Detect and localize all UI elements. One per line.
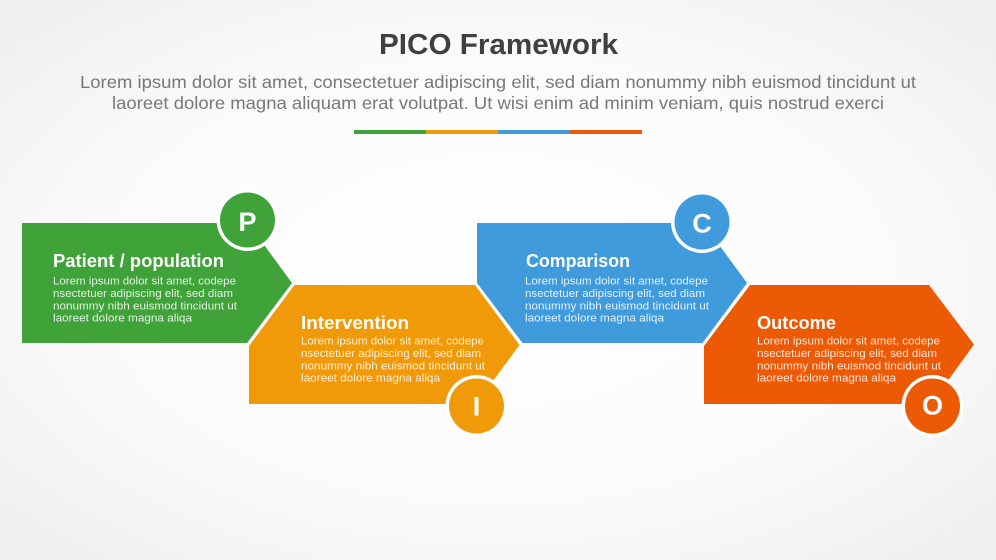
heading: patient / population: Patient / population: [53, 251, 224, 271]
badge: P: [216, 189, 278, 251]
body text: comparison: laoreet dolore magna aliqa: [525, 313, 665, 325]
body text: outcome: laoreet dolore magna aliqa: [757, 373, 897, 385]
badge: C: [671, 191, 733, 253]
body text: intervention: laoreet dolore magna aliqa: [301, 373, 441, 385]
body text: outcome: nonummy nibh euismod tincidunt ut: [757, 360, 942, 372]
body text: intervention: nsectetuer adipiscing elit, sed diam: [301, 348, 481, 360]
heading: outcome: Outcome: [757, 313, 836, 333]
badge: O: [902, 375, 964, 437]
body text: comparison: [525, 276, 710, 325]
body text: comparison: nsectetuer adipiscing elit, sed diam: [525, 288, 705, 300]
body text: patient: Lorem ipsum dolor sit amet, codepe: [53, 276, 236, 288]
colour divider bar: [354, 130, 642, 134]
body text: comparison: nonummy nibh euismod tincidunt ut: [525, 300, 710, 312]
subtitle text: Lorem ipsum dolor sit amet, consectetuer adipiscing elit, sed diam nonummy nibh euismod tincidunt ut: [80, 72, 916, 92]
heading: comparison: Comparison: [526, 251, 630, 271]
body text: outcome: Lorem ipsum dolor sit amet, codepe: [757, 336, 940, 348]
body text: patient: nonummy nibh euismod tincidunt ut: [53, 300, 238, 312]
subtitle text: laoreet dolore magna aliquam erat volutpat. Ut wisi enim ad minim veniam, quis nostrud exerci: [112, 93, 884, 113]
badge: C: C: [692, 208, 712, 238]
badge: O: O: [922, 390, 943, 420]
body text: intervention: Lorem ipsum dolor sit amet, codepe: [301, 336, 484, 348]
panel: patient / population: [22, 189, 292, 343]
heading: intervention: Intervention: [301, 313, 409, 333]
body text: intervention: nonummy nibh euismod tincidunt ut: [301, 360, 486, 372]
panel: comparison: [477, 191, 747, 343]
panel: intervention: [249, 285, 520, 437]
subtitle text: [80, 72, 916, 113]
badge: P: P: [238, 207, 257, 237]
body text: patient: nsectetuer adipiscing elit, sed diam: [53, 288, 233, 300]
badge: I: [446, 375, 508, 437]
body text: patient: laoreet dolore magna aliqa: [53, 313, 193, 325]
title: PICO Framework: [379, 29, 618, 61]
body text: intervention: [301, 336, 486, 385]
body text: outcome: [757, 336, 942, 385]
body text: patient: [53, 276, 238, 325]
badge: I: I: [473, 392, 480, 422]
body text: comparison: Lorem ipsum dolor sit amet, codepe: [525, 276, 708, 288]
body text: outcome: nsectetuer adipiscing elit, sed diam: [757, 348, 937, 360]
panel: outcome: [704, 285, 974, 437]
